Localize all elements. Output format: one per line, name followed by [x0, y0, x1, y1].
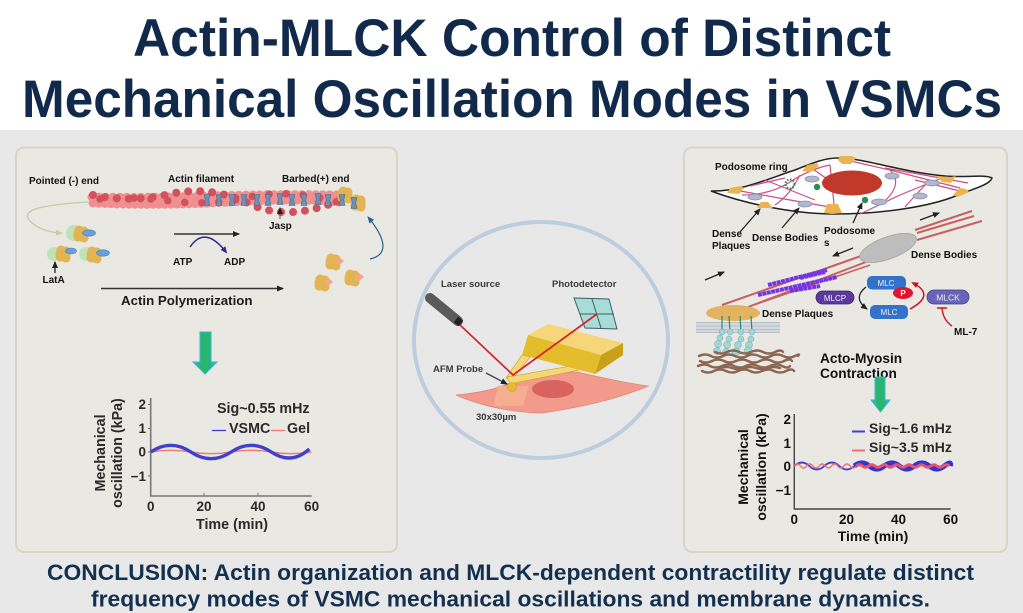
dense body grey: [856, 227, 920, 269]
label: acto-myosin contraction: [820, 351, 902, 381]
label: podosomes: Podosome: [824, 226, 876, 237]
MLCK: MLCK: [936, 292, 960, 302]
x ticks: 60: [304, 499, 319, 514]
label: acto-myosin contraction: Acto-Myosin: [820, 351, 902, 366]
arrow: green down: [193, 332, 217, 374]
label: actin filament: Actin filament: [168, 174, 235, 185]
arrow: AFM probe pointer: [486, 373, 507, 384]
line: 1.6 mHz: [794, 462, 854, 470]
label: dense bodies: Dense Bodies: [752, 233, 819, 244]
y ticks: 0: [138, 444, 146, 460]
panel: actin polymerization: [16, 148, 397, 552]
laser beam: [460, 314, 597, 375]
x axis label: Time (min): [838, 528, 908, 544]
y ticks: −1: [776, 483, 791, 498]
phosphate: [893, 287, 913, 299]
cell: [456, 372, 648, 413]
stress fibres: [722, 211, 982, 307]
y ticks: 0: [783, 459, 791, 474]
conclusion: frequency modes of VSMC mechanical oscillations and membrane dynamics.: [91, 586, 930, 612]
label: LatA: LatA: [42, 275, 65, 286]
arrow: ATP straight: [174, 233, 239, 235]
scan area: [493, 386, 529, 406]
MLCP: MLCP: [824, 294, 846, 303]
legend: Gel: [287, 421, 310, 437]
title: [22, 9, 1002, 129]
x ticks: 20: [196, 499, 212, 514]
cantilever body: [506, 324, 623, 392]
monomers with LatA: [47, 225, 110, 264]
arrows: cell labels: [740, 203, 862, 232]
y ticks: 1: [138, 421, 146, 436]
x ticks: 20: [839, 512, 854, 527]
y axis label: [93, 398, 126, 508]
legend: Sig~0.55 mHz: [217, 401, 310, 417]
MLC bottom: MLC: [881, 308, 898, 317]
title: Actin-MLCK Control of Distinct: [133, 9, 891, 68]
smooth muscle cell: [711, 156, 992, 214]
myosin: [758, 270, 837, 295]
x axis label: Time (min): [196, 517, 268, 533]
label: barbed end: Barbed(+) end: [282, 174, 350, 185]
integrins: [714, 316, 755, 356]
arrow: dephosphorylation: [859, 287, 867, 309]
x ticks: [147, 499, 319, 514]
podosome ring: [786, 180, 794, 188]
inhibition: [937, 308, 952, 326]
arrow: phosphorylation: [910, 283, 924, 309]
legend: [852, 420, 952, 455]
y ticks: [131, 397, 146, 484]
label: dense bodies 2: Dense Bodies: [911, 250, 978, 261]
MLC top: MLC: [878, 279, 895, 288]
y ticks: 2: [783, 412, 791, 427]
label: actin polymerization: Actin Polymerization: [121, 293, 253, 308]
x ticks: 0: [147, 499, 154, 514]
label: ML-7: ML-7: [954, 327, 978, 338]
x ticks: 60: [943, 512, 958, 527]
legend: [212, 401, 310, 437]
x ticks: 0: [791, 512, 798, 527]
x ticks: 40: [250, 499, 266, 514]
label: scan size: 30x30µm: [476, 412, 516, 423]
MLCK: [927, 290, 969, 304]
label: dense plaques: Plaques: [712, 241, 751, 252]
arrow: Jasp pointer: [279, 208, 281, 219]
line: gel: [151, 450, 312, 454]
podosomes: [814, 184, 868, 203]
label: photodetector: Photodetector: [552, 279, 617, 290]
label: pointed end: Pointed (-) end: [29, 176, 99, 187]
legend: Sig~3.5 mHz: [869, 439, 952, 455]
phosphate: P: [900, 289, 906, 298]
nucleus: [822, 170, 882, 196]
free monomers: [314, 254, 364, 292]
y axis label: oscillation (kPa): [753, 413, 769, 521]
arrow: polymerization: [101, 288, 283, 290]
y ticks: [776, 412, 791, 498]
y axis label: Mechanical: [93, 414, 109, 492]
actin filament: [92, 186, 366, 212]
plaque oval: [706, 305, 760, 321]
chart: mechanical oscillation left: [93, 397, 319, 533]
x ticks: [791, 512, 958, 527]
y ticks: 1: [783, 436, 791, 451]
label: dense plaques: Dense: [712, 229, 742, 240]
line: VSMC: [151, 445, 309, 459]
label: podosomes: [824, 226, 876, 249]
label: ADP: ADP: [224, 257, 245, 268]
label: laser source: Laser source: [441, 279, 500, 290]
label: podosome ring: Podosome ring: [715, 162, 788, 173]
label: Jasp: Jasp: [269, 221, 292, 232]
MLCP: [816, 291, 854, 304]
dense plaques: [727, 156, 969, 214]
MLC top: [867, 276, 906, 290]
extracellular matrix: [698, 350, 799, 372]
conclusion: [47, 560, 975, 612]
y axis label: oscillation (kPa): [110, 398, 126, 508]
arrow: pointed end to monomers: [27, 202, 88, 233]
arrows: contraction direction: [705, 213, 939, 280]
arrow: monomers to barbed end: [368, 217, 383, 259]
panel: AFM setup circle: [414, 222, 668, 458]
MLC bottom: [870, 305, 908, 319]
arrow: ATP to ADP: [190, 237, 226, 252]
chart: mechanical oscillation right: [735, 412, 958, 544]
nucleus: [532, 380, 574, 398]
label: podosomes: s: [824, 238, 830, 249]
membrane: [696, 322, 780, 333]
arrow: LatA pointer: [54, 262, 56, 273]
panel: acto-myosin contraction: [684, 148, 1007, 552]
photodetector: [574, 298, 617, 329]
conclusion: CONCLUSION: Actin organization and MLCK-dependent contractility regulate distinct: [47, 560, 975, 585]
label: AFM probe: AFM Probe: [433, 364, 483, 375]
y axis label: [735, 413, 769, 521]
arrow: green down: [871, 377, 890, 412]
legend: Sig~1.6 mHz: [869, 420, 952, 436]
title: Mechanical Oscillation Modes in VSMCs: [22, 70, 1002, 129]
label: ATP: ATP: [173, 257, 193, 268]
dense bodies: [748, 173, 940, 207]
line: 3.5 mHz: [794, 464, 856, 468]
legend: VSMC: [229, 421, 270, 437]
label: acto-myosin contraction: Contraction: [820, 366, 897, 381]
label: dense plaques 2: Dense Plaques: [762, 309, 834, 320]
x ticks: 40: [891, 512, 906, 527]
MLC signalling: [816, 276, 978, 338]
laser source: [430, 298, 461, 324]
y axis label: Mechanical: [735, 429, 751, 505]
label: dense plaques: [712, 229, 751, 252]
y ticks: −1: [131, 469, 146, 484]
y ticks: 2: [138, 397, 146, 412]
